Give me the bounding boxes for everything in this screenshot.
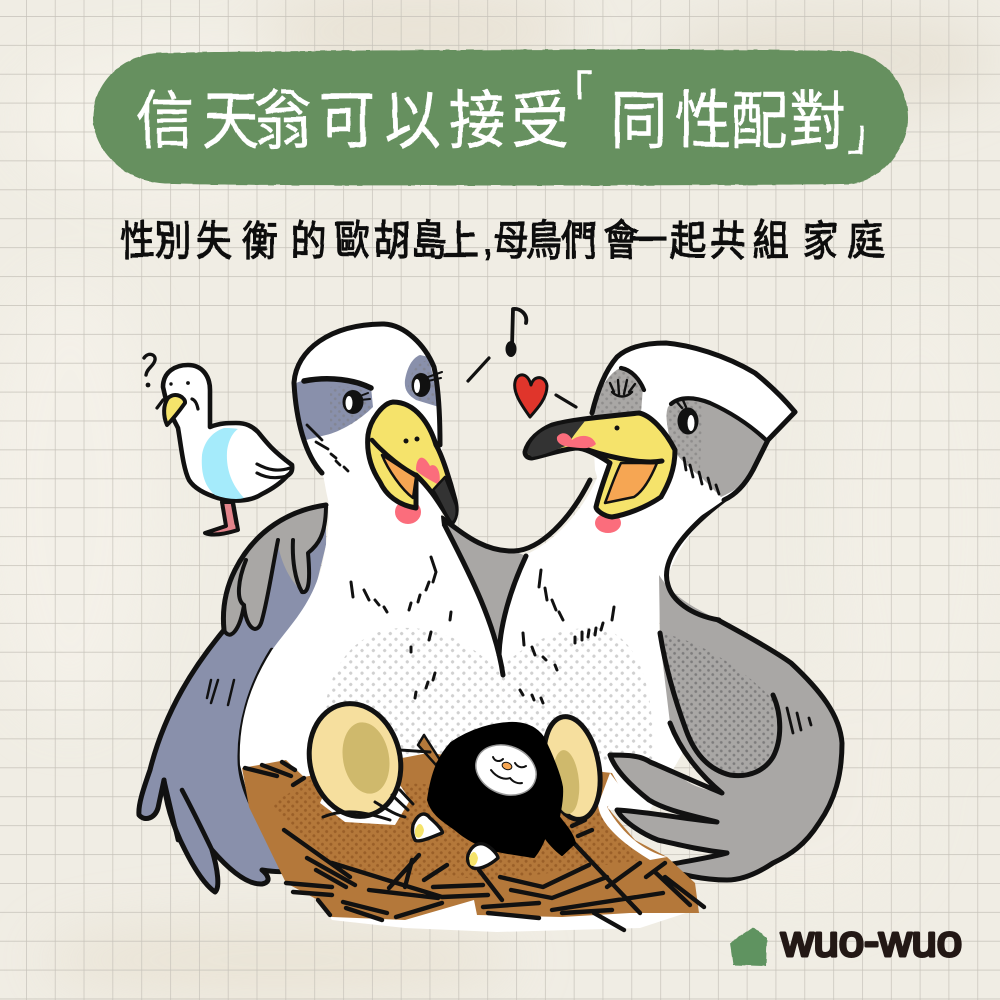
illustration: two albatrosses on a nest	[139, 309, 842, 932]
feather ticks on breast	[351, 557, 614, 703]
right bird head	[525, 343, 795, 533]
right bird beak	[525, 413, 675, 533]
bird bodies	[240, 440, 724, 810]
mask: slate patches	[295, 355, 439, 440]
title text: 」	[848, 111, 892, 160]
title text: 「	[549, 68, 593, 117]
title text: 信天翁可以接受同性配對	[137, 85, 846, 157]
chick	[412, 723, 575, 868]
title banner	[93, 50, 908, 186]
left bird beak	[368, 402, 457, 524]
subtitle: 性別失衡的歐胡島上,母鳥們會一起共組家庭	[119, 219, 884, 265]
right bird: folded wing	[610, 575, 842, 880]
left bird: back wing, slate with grey feathers	[139, 505, 326, 892]
chick feet	[412, 814, 442, 841]
right bird eyes	[610, 380, 698, 434]
nest	[242, 735, 704, 932]
heart	[515, 375, 547, 417]
music note, heart and singing lines	[468, 309, 576, 417]
logo: house icon	[730, 927, 767, 966]
left bird head	[294, 324, 457, 525]
left bird eyes	[342, 372, 442, 414]
nest sticks	[245, 762, 704, 930]
small gull with question mark	[144, 354, 292, 534]
centre grey wing between the birds	[442, 518, 526, 650]
bird outlines: breast lines	[442, 480, 724, 675]
question mark	[144, 354, 155, 387]
logo: wordmark: wuo-wuo	[780, 917, 962, 966]
mask: right grey patches	[592, 368, 766, 497]
eggs	[298, 694, 608, 826]
